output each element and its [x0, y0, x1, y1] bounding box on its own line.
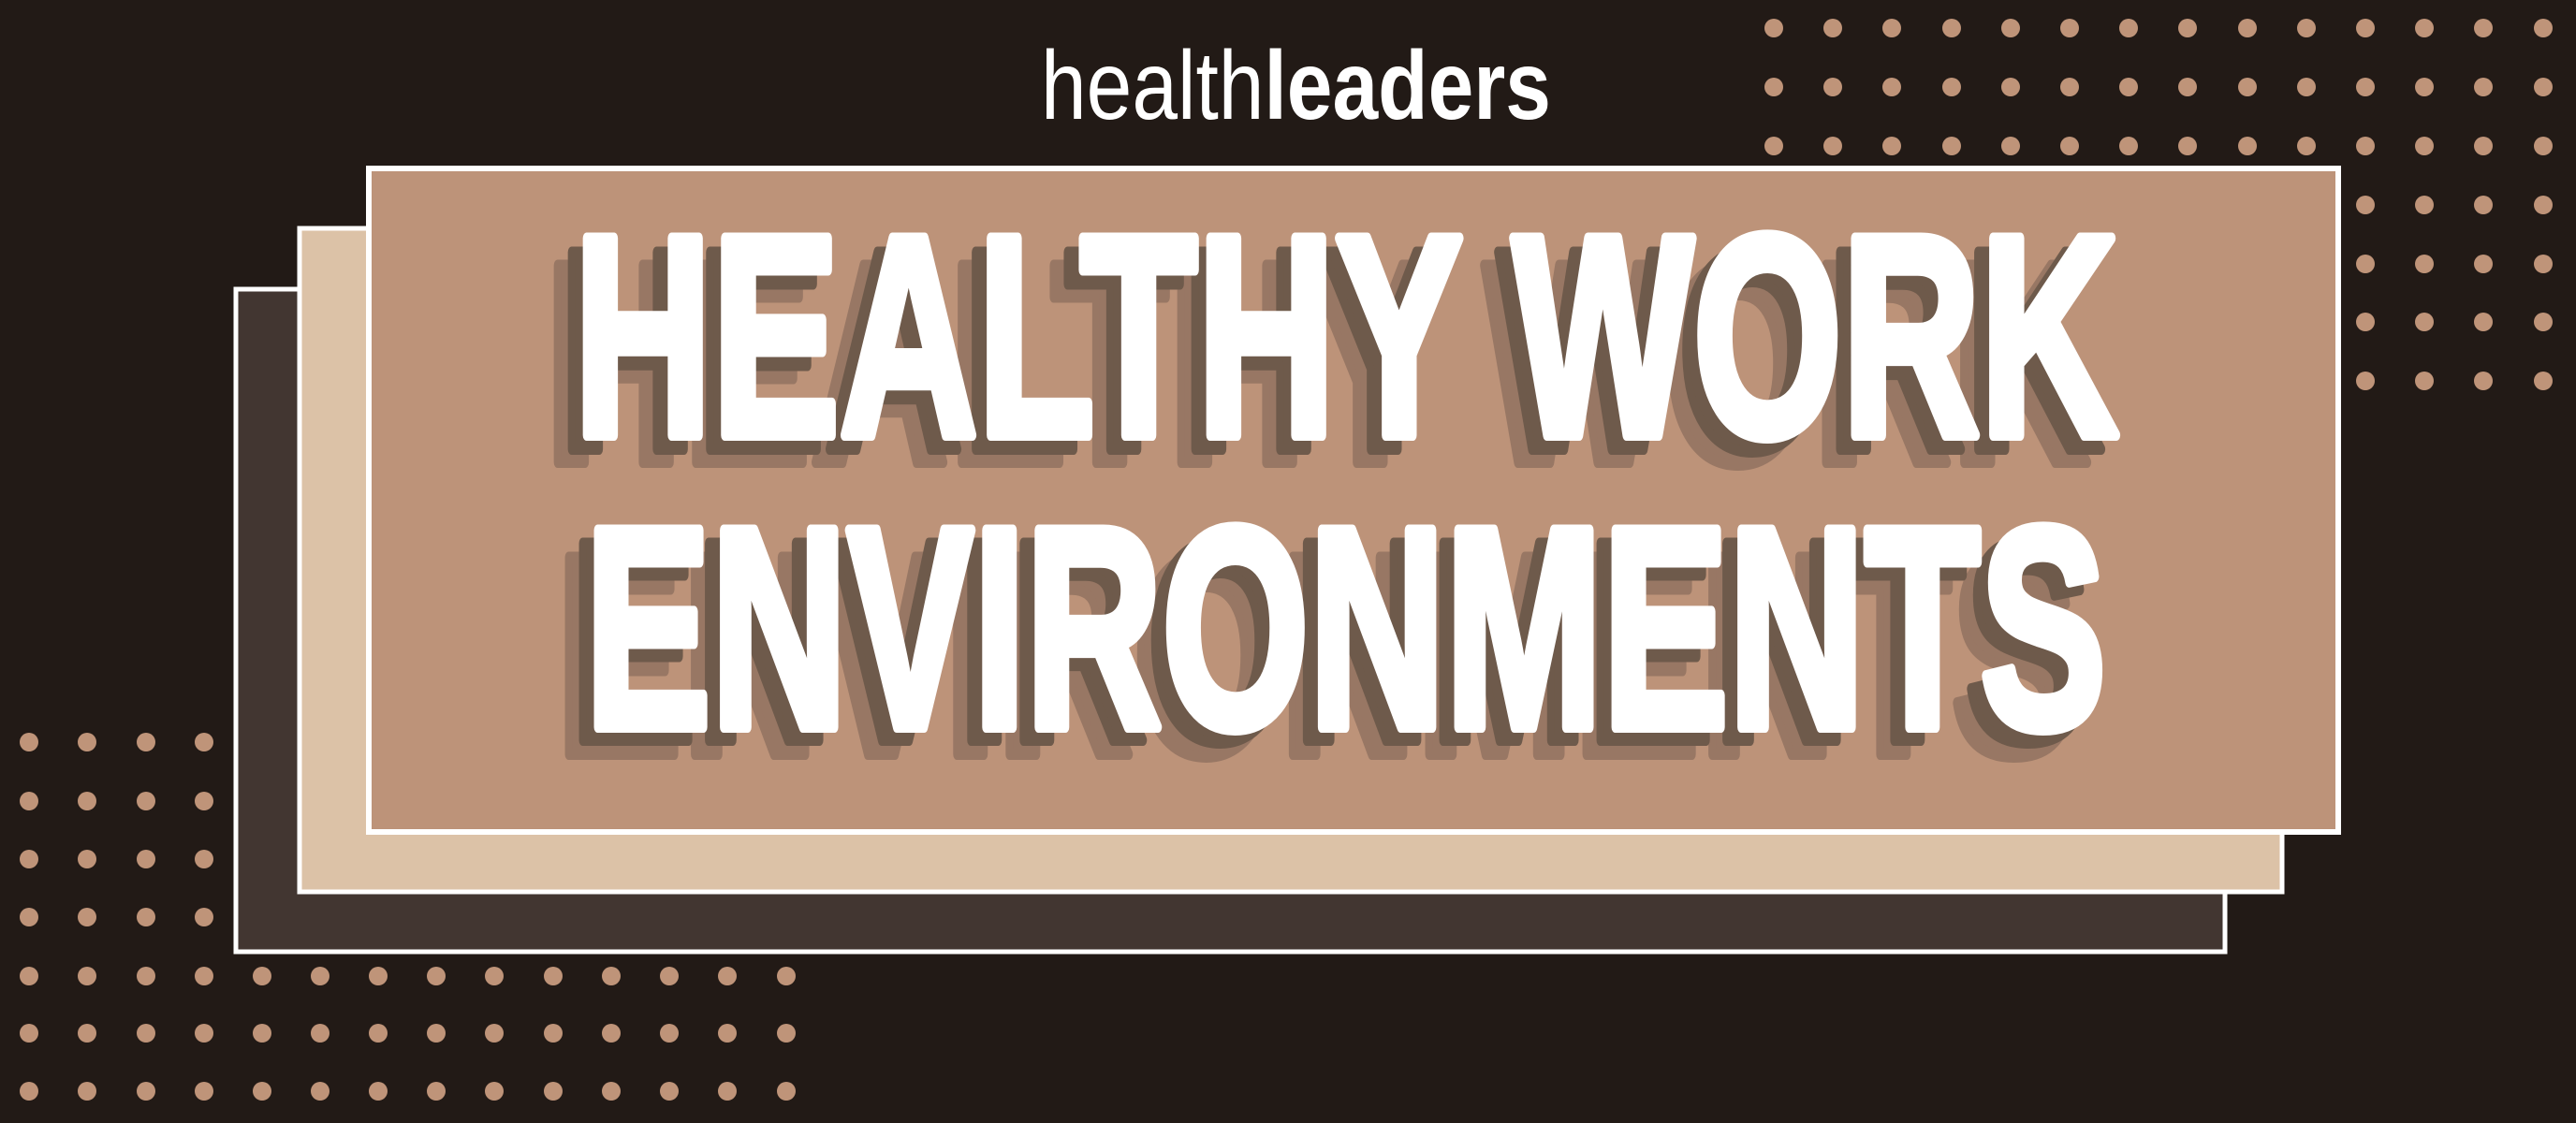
logo: healthleaders: healthleaders	[1041, 32, 1551, 140]
dot grid: top right	[1764, 19, 2553, 390]
title: Healthy Work Environments	[545, 176, 2118, 815]
panel: middle beige layer	[300, 228, 2282, 892]
dot grid: bottom left	[20, 733, 796, 1101]
panel: back dark layer	[236, 289, 2225, 952]
panel: front title card	[369, 168, 2338, 832]
